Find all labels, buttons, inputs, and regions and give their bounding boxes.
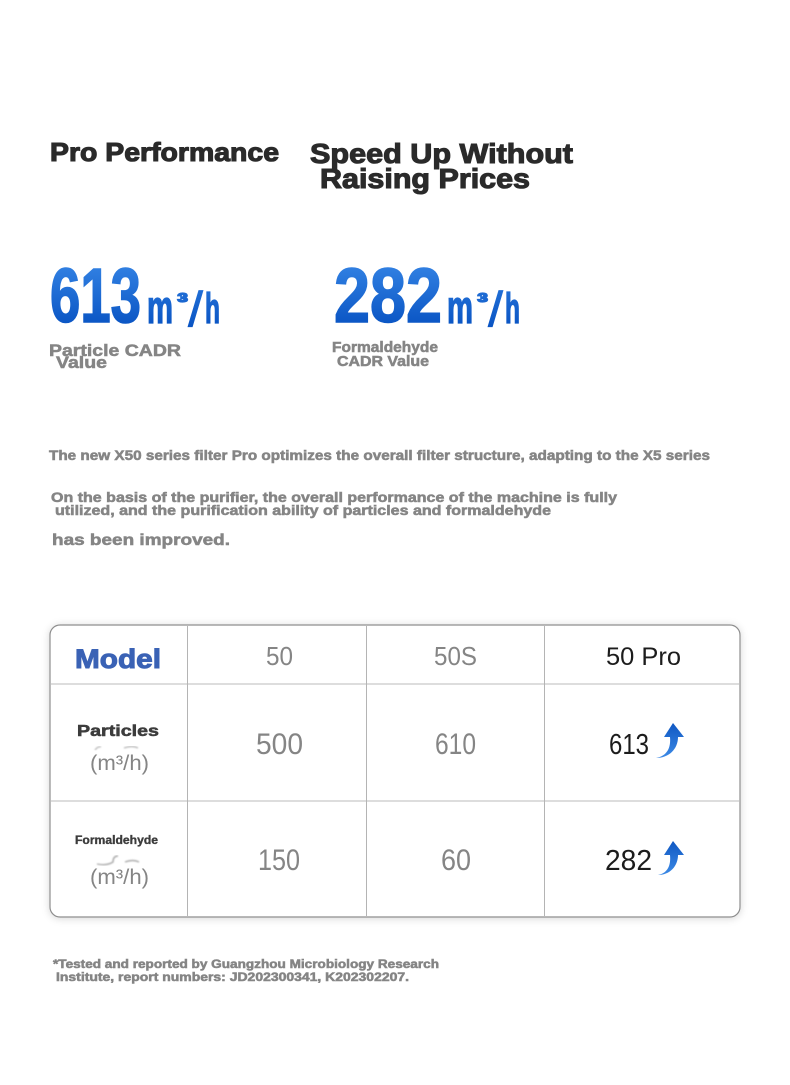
icon: up arrow (658, 841, 684, 875)
header row: 50 Pro (606, 643, 681, 671)
table frame (50, 625, 740, 917)
label: Formaldehyde CADR Value: CADR Value (337, 354, 429, 370)
description text block: The new X50 series filter Pro optimizes the overall filter structure, adapting to the X5 series (49, 448, 710, 463)
description text block: On the basis of the purifier, the overall performance of the machine is fully (51, 489, 617, 505)
header row: 50 (266, 641, 293, 671)
description text block (49, 448, 710, 549)
stat: particle CADR 613: / (188, 283, 203, 337)
footnote: *Tested and reported by Guangzhou Microbiology Research (53, 957, 439, 971)
row: particles: 610 (435, 728, 476, 761)
footnote: Institute, report numbers: JD202300341, K202302207. (56, 970, 409, 984)
description text block: utilized, and the purification ability of particles and formaldehyde (55, 502, 551, 518)
row: formaldehyde (75, 835, 684, 889)
header row: 50S (434, 641, 477, 671)
header row: Model (75, 644, 161, 674)
stat: formaldehyde CADR 282: ³ (477, 289, 488, 316)
row: particles: 500 (256, 728, 303, 761)
title: Speed Up Without Raising Prices: Raising Prices (320, 163, 530, 194)
stat: particle CADR 613: m (147, 281, 173, 333)
label: Particle CADR Value: Particle CADR (49, 341, 181, 360)
row: particles: 613 (609, 729, 649, 761)
label: Formaldehyde CADR Value: Formaldehyde (332, 340, 438, 356)
description text block: has been improved. (52, 532, 230, 549)
row: particles (77, 723, 684, 775)
row: formaldehyde: (m³/h) (90, 866, 149, 889)
row: formaldehyde: 150 (258, 844, 300, 877)
panel: comparison table (50, 625, 740, 917)
stat: formaldehyde CADR 282: / (488, 283, 503, 337)
stat: formaldehyde CADR 282 (334, 253, 520, 339)
title: Pro Performance: Pro Performance (50, 137, 279, 167)
stat: formaldehyde CADR 282: 282 (334, 253, 442, 339)
label: Formaldehyde CADR Value (332, 340, 438, 370)
row: formaldehyde: 60 (441, 844, 471, 877)
stat: particle CADR 613: ³ (177, 289, 188, 316)
title: Speed Up Without Raising Prices: Speed Up Without (310, 138, 573, 169)
table grid lines (51, 626, 739, 916)
stat: formaldehyde CADR 282: h (505, 285, 520, 333)
footnote (53, 957, 439, 984)
row: particles: Particles (77, 723, 159, 740)
row: particles: (m³/h) (90, 752, 149, 775)
stat: particle CADR 613: 613 (50, 253, 141, 339)
label: Particle CADR Value (49, 341, 181, 372)
stat: formaldehyde CADR 282: m (447, 281, 473, 333)
title: Speed Up Without Raising Prices (310, 138, 573, 194)
icon: up arrow (656, 723, 684, 758)
row: formaldehyde: 282 (605, 845, 652, 877)
row: formaldehyde: Formaldehyde (75, 835, 158, 847)
header row (75, 641, 681, 674)
label: Particle CADR Value: Value (56, 353, 107, 372)
stat: particle CADR 613: h (205, 285, 220, 333)
